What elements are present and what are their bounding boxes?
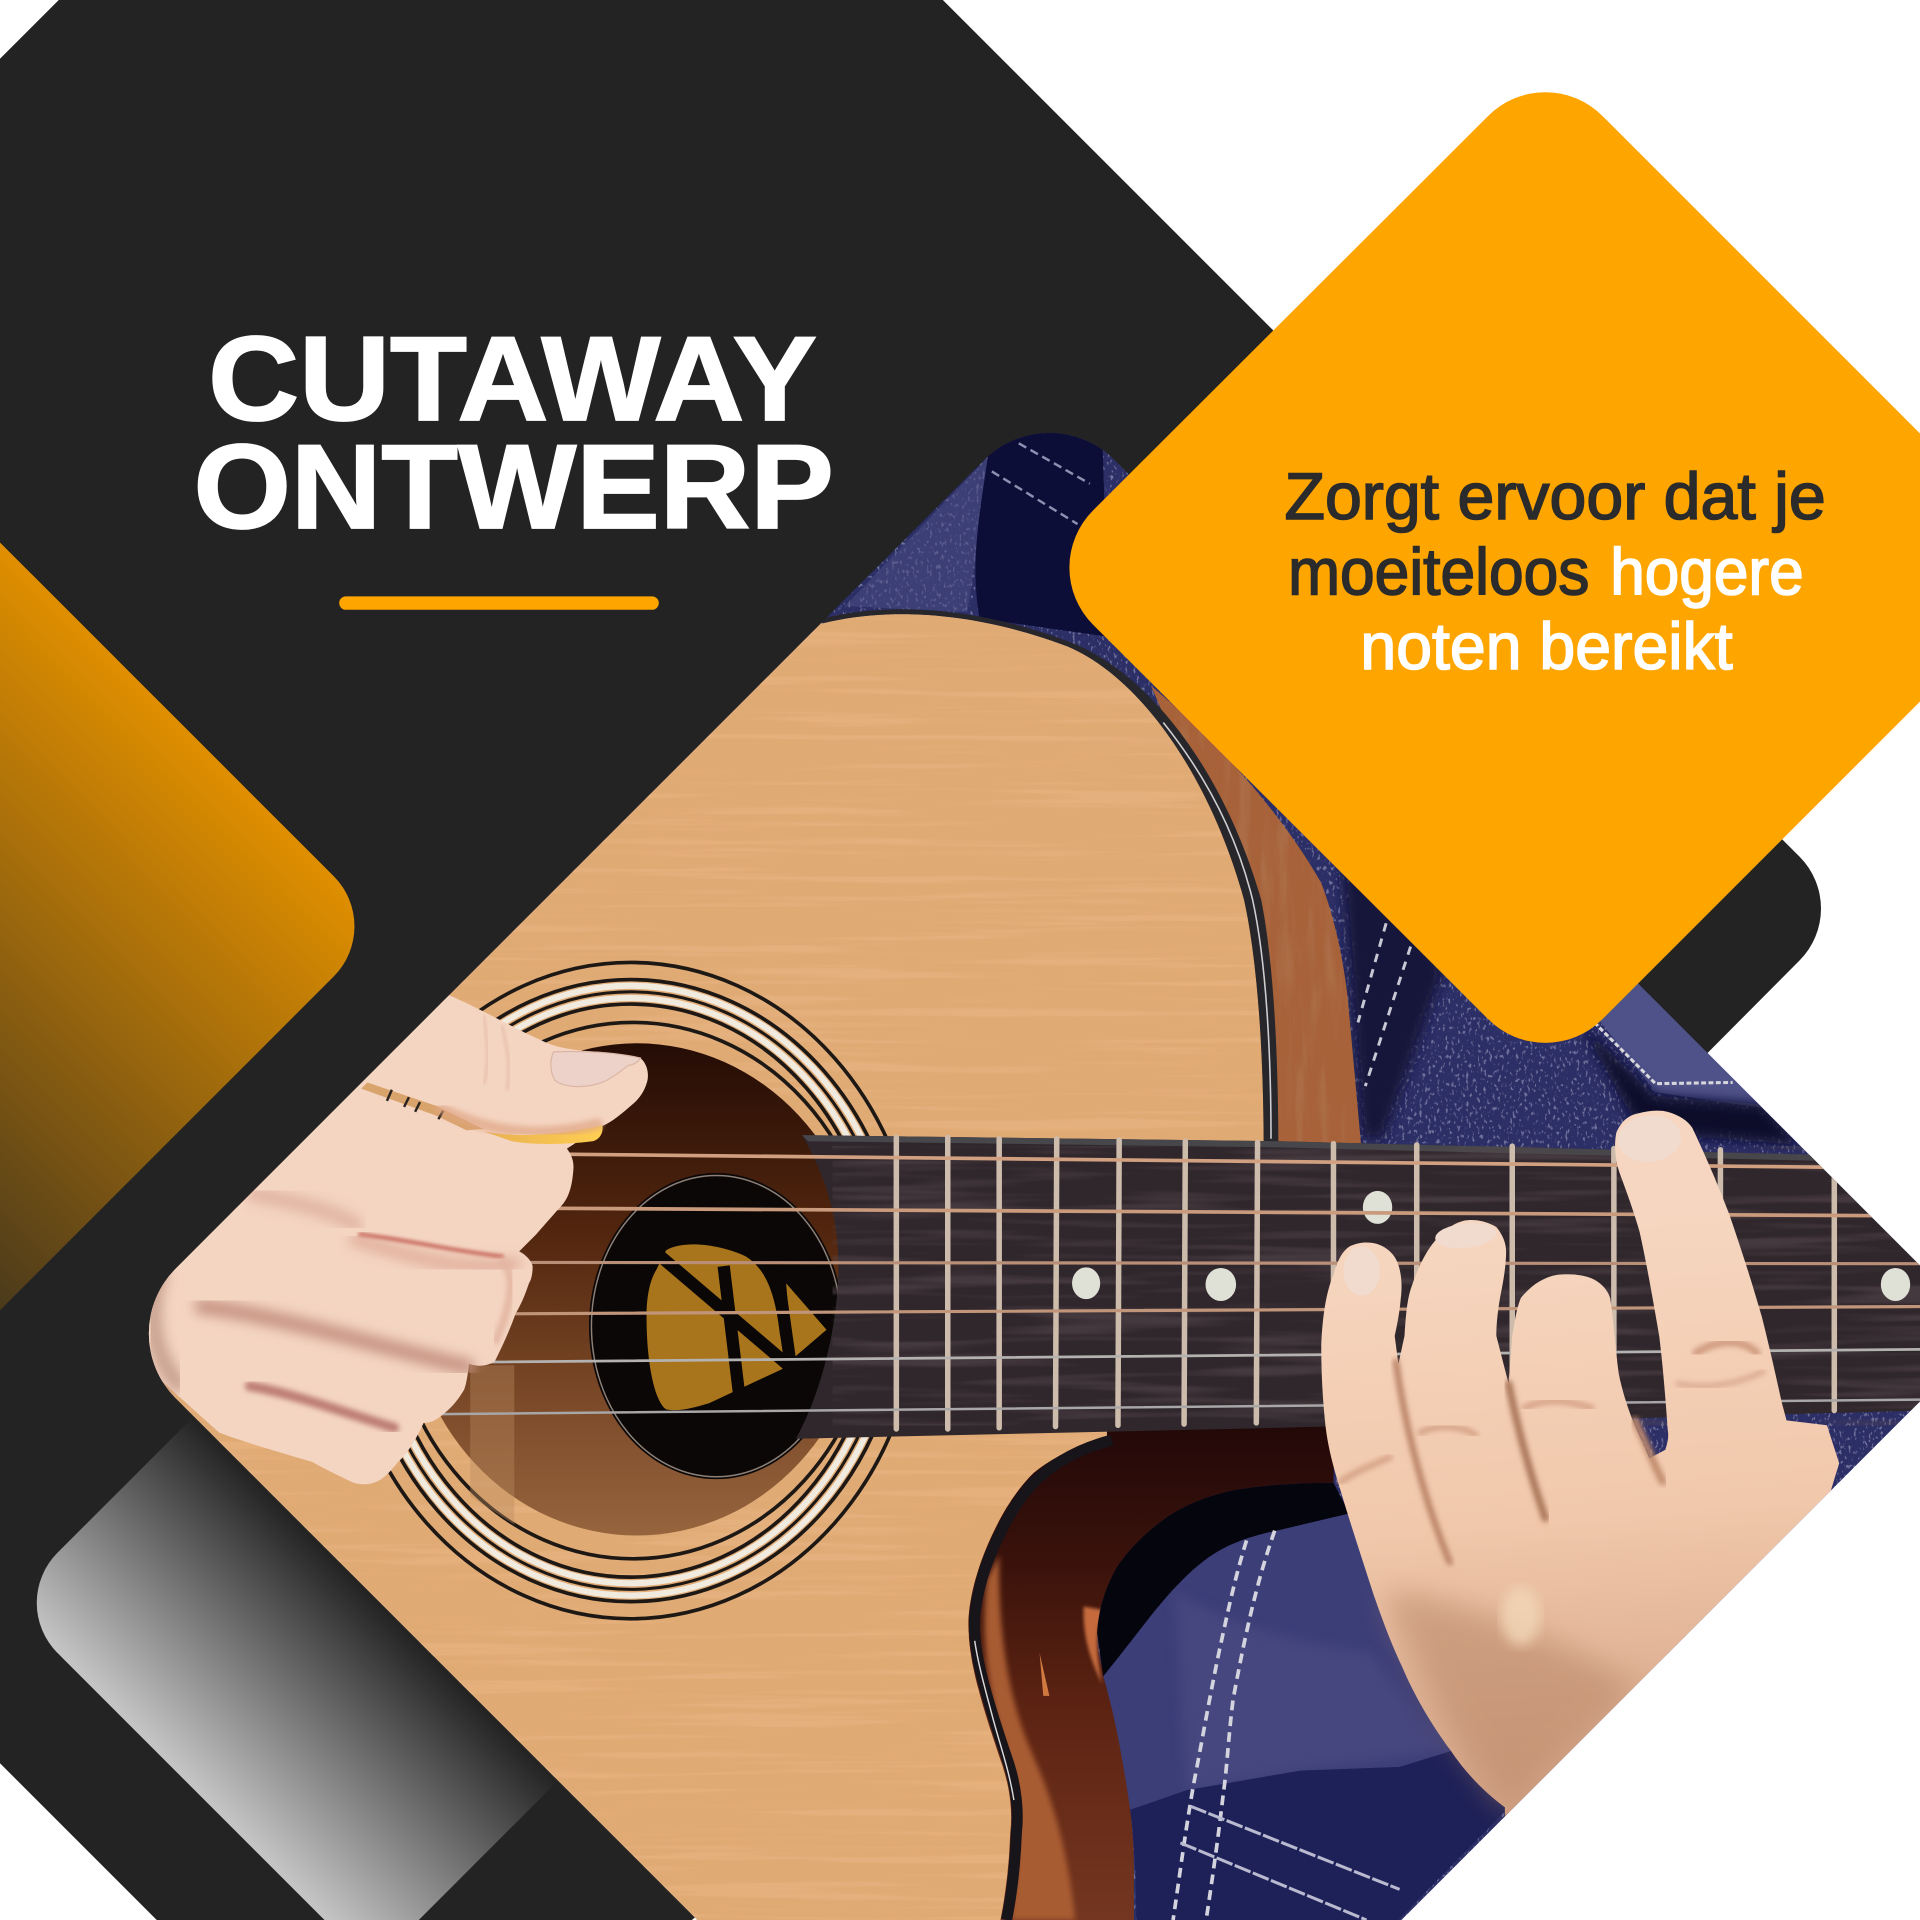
heading underline xyxy=(339,596,659,610)
shadow under collar xyxy=(1580,1022,1800,1145)
finger separations xyxy=(1341,1342,1763,1562)
callout text: Zorgt ervoor dat je xyxy=(1284,460,1826,534)
small highlight streak xyxy=(1040,1653,1049,1696)
black opening behind cutaway xyxy=(1097,1483,1349,1676)
right hand on the frets xyxy=(1321,1111,1839,1816)
heading: cutaway ontwerp xyxy=(193,312,834,554)
fretboard grain xyxy=(833,1146,1920,1425)
shape: grey gradient diamond at bottom left xyxy=(37,1390,612,1920)
fret markers xyxy=(1072,1191,1910,1301)
leaf logo xyxy=(647,1244,827,1410)
lit band along cutaway binding xyxy=(985,1555,1075,1920)
wood grain xyxy=(148,617,1261,1919)
lower dark denim xyxy=(1130,1751,1509,1920)
gap between thumb and index showing rosette xyxy=(361,1082,484,1130)
cutaway binding xyxy=(975,1440,1112,1920)
upper lit denim xyxy=(845,453,992,612)
photo: guitar player in a rounded diamond xyxy=(148,432,1920,1920)
callout text xyxy=(1284,460,1826,684)
callout text: moeiteloos xyxy=(1288,535,1589,609)
thumb nail xyxy=(551,1052,640,1087)
body binding xyxy=(823,609,1278,1151)
finger nails xyxy=(1343,1112,1683,1296)
hand silhouette xyxy=(1321,1111,1839,1816)
jacket stitching xyxy=(1358,923,1411,1086)
cutaway binding highlight xyxy=(975,1641,1014,1800)
collar stitching xyxy=(1594,1022,1733,1084)
upper dark shirt area xyxy=(975,422,1108,637)
top seam stitching xyxy=(992,443,1090,524)
back of hand highlight xyxy=(1501,1587,1540,1646)
fretboard top edge xyxy=(802,1135,1920,1163)
gap showing denim between two fingers xyxy=(1509,1420,1555,1524)
frets xyxy=(896,1138,1834,1429)
guitar: strings xyxy=(429,1153,1920,1414)
pocket seams xyxy=(1180,1806,1400,1920)
panel: orange callout diamond xyxy=(1069,92,1920,1043)
guitar: soundhole xyxy=(440,1043,838,1536)
guitar: black label with leaf logo xyxy=(589,1173,844,1479)
guitar: lower cutaway side xyxy=(966,1408,1509,1920)
guitar: soundhole rosette xyxy=(388,960,892,1621)
callout text: noten bereikt xyxy=(1360,610,1733,684)
guitar: spruce top xyxy=(148,609,1278,1920)
lit denim texture xyxy=(1182,1605,1432,1783)
left hand holding the pick xyxy=(110,994,648,1484)
rosette lines in the gap xyxy=(387,1090,443,1119)
denim texture xyxy=(784,404,1920,1920)
lit denim on leg xyxy=(1103,1513,1451,1810)
soundhole interior brace xyxy=(470,1365,514,1524)
palm shadow xyxy=(1384,1592,1641,1810)
binding highlight xyxy=(1163,722,1271,1139)
guitar: fretboard xyxy=(796,1135,1920,1439)
hand shading xyxy=(153,1016,598,1428)
shape: orange gradient diamond on the left xyxy=(0,542,354,1310)
dark shadow beside guitar side xyxy=(1341,845,1445,1139)
guitar: mahogany upper side xyxy=(1151,686,1371,1151)
denim background xyxy=(98,392,1920,1920)
leg stitching xyxy=(1173,1531,1275,1920)
shirt collar xyxy=(1594,980,1763,1108)
hand silhouette xyxy=(110,994,648,1484)
highlight on side xyxy=(1084,1607,1104,1684)
side grain xyxy=(1182,732,1334,1142)
heading: cutaway ontwerp: CUTAWAY xyxy=(208,312,817,446)
heading: cutaway ontwerp: ONTWERP xyxy=(193,420,834,554)
guitar pick xyxy=(484,1125,603,1144)
callout text: hogere xyxy=(1610,535,1804,609)
